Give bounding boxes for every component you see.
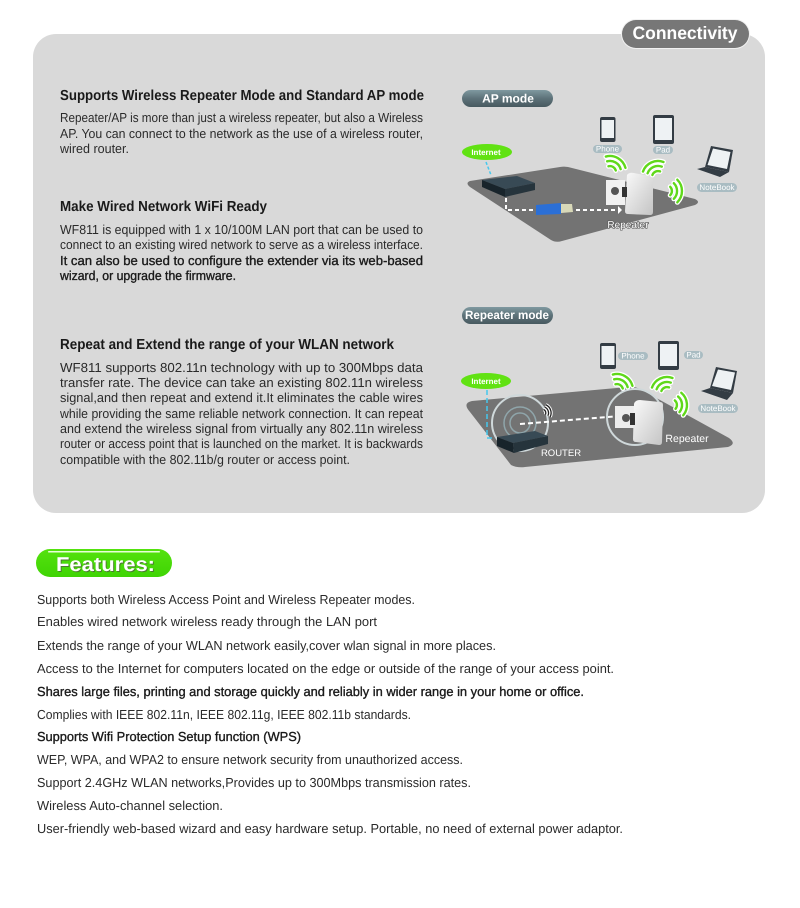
- features list: Extends the range of your WLAN network easily,cover wlan signal in more places.: [37, 638, 496, 653]
- icon: repeater: [622, 173, 653, 215]
- icon: wifi signal pad: [641, 158, 666, 178]
- label: pad: Pad: [656, 146, 670, 154]
- heading: repeater and AP mode: Supports Wireless Repeater Mode and Standard AP mode: [60, 88, 424, 104]
- floor: [468, 167, 698, 242]
- text block: repeat and extend: router or access point that is launched on the market. It is backwards: [60, 436, 423, 451]
- heading: wired network: Make Wired Network WiFi Ready: [60, 199, 267, 215]
- icon: router signal rings: [492, 395, 548, 451]
- diagram: AP mode: [462, 90, 737, 242]
- label: notebook: NoteBook: [700, 404, 737, 413]
- features list: WEP, WPA, and WPA2 to ensure network security from unauthorized access.: [37, 752, 463, 767]
- arrow: wireless link: [520, 416, 620, 424]
- text block: repeat and extend: while providing the same reliable network connection. It can repeat: [59, 406, 423, 421]
- icon: wifi signal pad: [650, 374, 675, 394]
- icon: phone: [600, 117, 616, 142]
- text block: wired network: connect to an existing wired network to serve as a wireless interface.: [60, 237, 423, 252]
- badge: connectivity: [621, 19, 750, 49]
- icon: internet: Internet: [471, 148, 501, 157]
- text block: repeater and AP mode: wired router.: [59, 141, 129, 156]
- text block: repeat and extend: WF811 supports 802.11n technology with up to 300Mbps data: [60, 360, 424, 375]
- icon: wall socket: [615, 406, 640, 428]
- panel: connectivity: [33, 34, 765, 513]
- diagram: repeater mode: [461, 307, 738, 467]
- text block: repeat and extend: signal,and then repeat and extend it.It eliminates the cable wires: [60, 390, 423, 405]
- icon: internet: Internet: [471, 377, 501, 386]
- text block: wired network: WF811 is equipped with 1 x 10/100M LAN port that can be used to: [60, 222, 423, 237]
- text block: wired network: [59, 222, 423, 283]
- icon: internet: [461, 373, 511, 438]
- text block: wired network: It can also be used to configure the extender via its web-based: [60, 253, 423, 268]
- icon: wifi signal phone: [609, 371, 635, 392]
- label: AP mode: [462, 90, 553, 107]
- icon: repeater: [630, 400, 663, 445]
- floor: [466, 387, 733, 467]
- label: repeater mode: Repeater mode: [465, 308, 549, 322]
- features list: User-friendly web-based wizard and easy hardware setup. Portable, no need of external power adaptor.: [37, 821, 623, 836]
- features list: Wireless Auto-channel selection.: [37, 798, 223, 813]
- badge: features: Features:: [56, 554, 155, 576]
- features list: Supports Wifi Protection Setup function (WPS): [37, 729, 301, 744]
- features list: Shares large files, printing and storage quickly and reliably in wider range in your home or office.: [37, 684, 584, 699]
- features list: Access to the Internet for computers located on the edge or outside of the range of your access point.: [37, 661, 614, 676]
- text block: repeater and AP mode: [59, 110, 423, 156]
- icon: wifi signal notebook: [674, 392, 688, 416]
- icon: notebook: [697, 146, 733, 177]
- text block: repeat and extend: [59, 360, 424, 467]
- label: pad: Pad: [686, 350, 701, 360]
- icon: router: [497, 431, 548, 453]
- icon: internet: [462, 144, 512, 175]
- heading: repeat and extend: Repeat and Extend the range of your WLAN network: [60, 337, 395, 353]
- icon: pad: [658, 341, 679, 370]
- label: notebook: NoteBook: [699, 183, 736, 192]
- label: AP mode: AP mode: [482, 92, 534, 106]
- label: phone: Phone: [596, 144, 620, 154]
- icon: LAN plug: [536, 203, 573, 215]
- features list: Complies with IEEE 802.11n, IEEE 802.11g, IEEE 802.11b standards.: [37, 707, 411, 722]
- features list: Enables wired network wireless ready through the LAN port: [37, 614, 377, 629]
- features list: Supports both Wireless Access Point and Wireless Repeater modes.: [37, 592, 415, 607]
- icon: repeater signal ring: [607, 389, 663, 445]
- icon: pad: [653, 115, 674, 144]
- text block: repeat and extend: compatible with the 802.11b/g router or access point.: [60, 452, 350, 467]
- icon: wifi signal notebook: [670, 180, 682, 202]
- text block: repeat and extend: transfer rate. The device can take an existing 802.11n wireless: [60, 375, 423, 390]
- text block: wired network: wizard, or upgrade the firmware.: [59, 268, 236, 283]
- icon: router: [482, 176, 535, 197]
- icon: wifi signal phone: [602, 153, 628, 174]
- icon: router wifi: [542, 404, 553, 418]
- label: repeater: Repeater: [607, 220, 649, 231]
- features list: Support 2.4GHz WLAN networks,Provides up to 300Mbps transmission rates.: [37, 775, 471, 790]
- features list: [37, 592, 623, 836]
- text block: repeater and AP mode: Repeater/AP is more than just a wireless repeater, but also a Wireless: [60, 110, 423, 125]
- label: phone: Phone: [621, 352, 645, 360]
- badge: connectivity: Connectivity: [632, 23, 738, 43]
- icon: wall socket: [606, 180, 625, 205]
- badge: features: [36, 549, 172, 577]
- label: repeater: Repeater: [665, 433, 709, 445]
- text block: repeater and AP mode: AP. You can connect to the network as the use of a wireless router,: [60, 126, 423, 141]
- badge: features: Features:: [57, 555, 156, 577]
- label: router: ROUTER: [541, 448, 581, 459]
- text block: repeat and extend: and extend the wireless signal from virtually any 802.11n wireless: [60, 421, 423, 436]
- icon: notebook: [701, 367, 737, 400]
- icon: phone: [600, 343, 616, 369]
- arrow: cable: [506, 198, 617, 210]
